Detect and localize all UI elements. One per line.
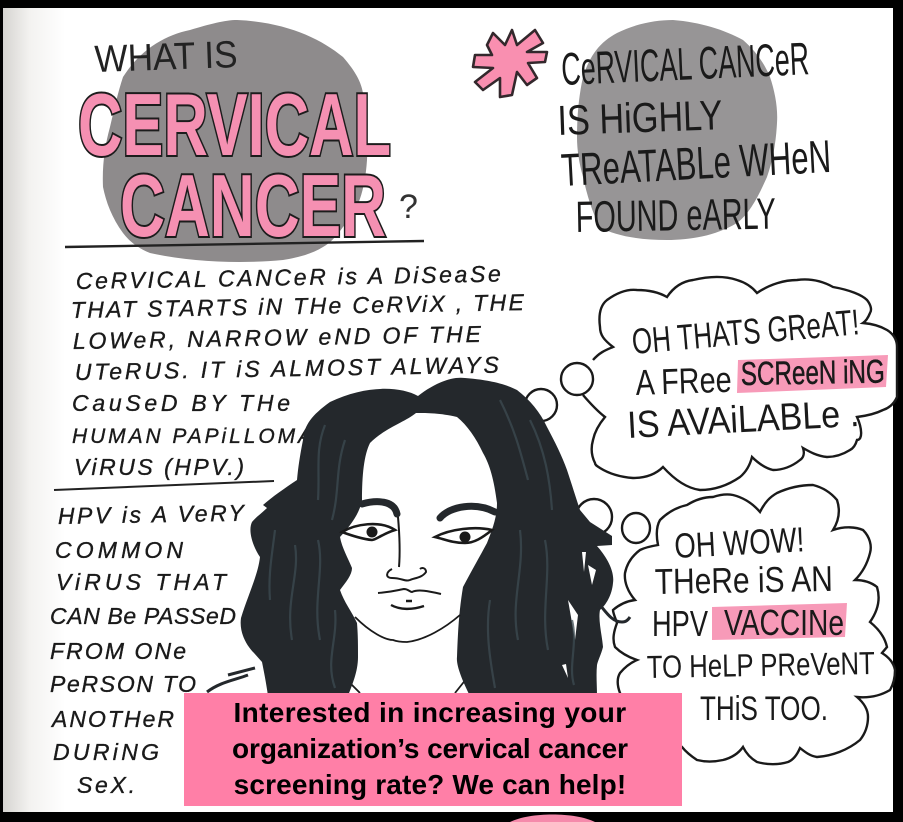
question mark: ? bbox=[399, 188, 418, 226]
heading: cervical: CERVICAL bbox=[78, 75, 391, 174]
grey blob behind title bbox=[103, 20, 367, 262]
hair left bbox=[241, 389, 419, 696]
bubble text bbox=[626, 301, 888, 447]
pink shape at page bottom bbox=[510, 814, 595, 822]
small bubble upper bbox=[561, 363, 593, 395]
small bubble lower bbox=[622, 513, 650, 543]
hair gaps bbox=[562, 552, 596, 678]
icon: pink asterisk bbox=[473, 30, 547, 97]
text block: hpv: DURiNG bbox=[53, 739, 159, 765]
left eye bbox=[342, 524, 395, 540]
right eyebrow bbox=[440, 506, 495, 518]
call to action: organization’s cervical cancer bbox=[232, 733, 628, 764]
heading: cancer: CANCER bbox=[120, 156, 386, 255]
bubble text: THiS TOO. bbox=[700, 690, 828, 728]
small bubble behind hair right bbox=[576, 499, 612, 535]
thought bubble: vaccine bbox=[613, 485, 895, 764]
text block: hpv: PeRSON TO bbox=[50, 671, 196, 697]
text block: definition: UTeRUS. IT iS ALMOST ALWAYS bbox=[75, 352, 500, 385]
text block: hpv bbox=[50, 500, 246, 798]
face and neck bbox=[346, 412, 494, 695]
nose bbox=[387, 517, 426, 581]
text block: hpv: ViRUS THAT bbox=[56, 569, 228, 595]
bubble text: VACCINe bbox=[724, 602, 844, 643]
thought bubble: screening bbox=[561, 277, 897, 490]
bubble text: THeRe iS AN bbox=[654, 558, 833, 602]
section divider bbox=[54, 481, 274, 490]
text block: hpv: COMMON bbox=[55, 537, 183, 563]
bubble text: OH WOW! bbox=[673, 520, 805, 566]
mouth bbox=[378, 589, 441, 594]
text block: hpv: CAN Be PASSeD bbox=[50, 603, 236, 629]
text block: hpv: FROM ONe bbox=[50, 638, 186, 664]
call to action: screening rate? We can help! bbox=[234, 769, 626, 800]
hair curl right bbox=[600, 605, 630, 622]
illustration: woman with dark hair bbox=[207, 378, 630, 696]
grey blob behind note bbox=[577, 20, 777, 240]
heading: what is: WHAT IS bbox=[94, 34, 238, 81]
call to action bbox=[184, 693, 682, 806]
text block: definition: CeRVICAL CANCeR is A DiSeaSe bbox=[76, 261, 501, 294]
text block: hpv: SeX. bbox=[77, 772, 135, 798]
text block: definition: ViRUS (HPV.) bbox=[74, 454, 244, 480]
title underline bbox=[65, 241, 424, 247]
jaw line bbox=[355, 615, 460, 642]
text block: definition: HUMAN PAPiLLOMA bbox=[72, 425, 312, 448]
call to action: Interested in increasing your bbox=[234, 697, 626, 728]
hair wisp bottom left bbox=[207, 668, 255, 692]
bubble text: HPV bbox=[652, 603, 708, 644]
hair right bbox=[416, 378, 613, 696]
bubble text: A FRee bbox=[635, 359, 732, 403]
right eye bbox=[435, 528, 492, 543]
small bubble behind hair top bbox=[525, 389, 557, 421]
text block: definition: THAT STARTS iN THe CeRViX , THE bbox=[71, 289, 525, 323]
text block: definition: CauSeD BY THe bbox=[72, 390, 290, 416]
note: highly treatable: FOUND eARLY bbox=[575, 190, 776, 242]
bubble text: IS AVAiLABLe . bbox=[626, 393, 860, 447]
bubble text bbox=[646, 520, 875, 728]
text block: hpv: ANOTHeR bbox=[50, 706, 174, 732]
text block: definition bbox=[71, 261, 525, 480]
note: highly treatable bbox=[557, 32, 832, 242]
text block: hpv: HPV is A VeRY bbox=[58, 500, 246, 529]
hair highlights bbox=[269, 400, 574, 688]
neck lines bbox=[350, 678, 467, 693]
left eyebrow bbox=[362, 502, 397, 514]
note: highly treatable: IS HiGHLY bbox=[557, 91, 723, 144]
text block: definition: LOWeR, NARROW eND OF THE bbox=[73, 321, 482, 354]
